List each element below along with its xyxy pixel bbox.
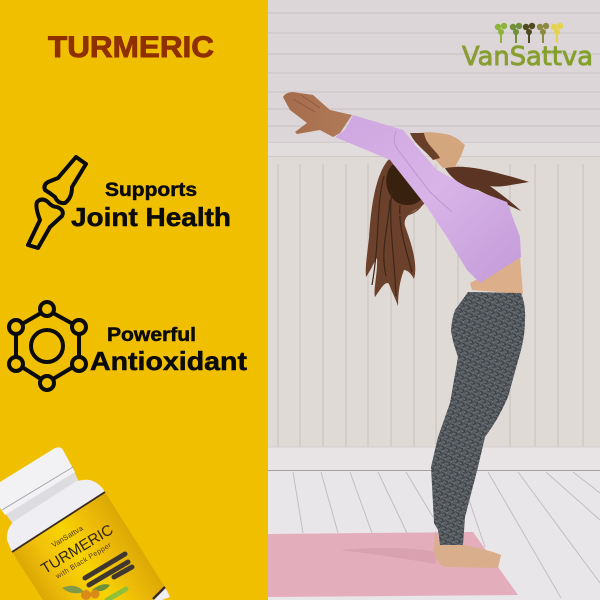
label turmeric leaves bbox=[62, 584, 110, 600]
text: joint health: Joint Health bbox=[71, 202, 231, 232]
benefit: joint health bbox=[71, 180, 231, 232]
photo: yoga pose bbox=[268, 0, 600, 600]
label title: TURMERIC bbox=[38, 521, 116, 578]
icon: joint bones bbox=[28, 157, 86, 248]
panel: yellow background bbox=[0, 0, 268, 600]
feet bbox=[434, 530, 501, 568]
floor bbox=[268, 471, 600, 600]
hands bbox=[283, 92, 352, 137]
label top band bbox=[12, 492, 105, 552]
finger lines bbox=[293, 95, 320, 112]
bottle neck bbox=[5, 471, 80, 524]
text: brand name: VanSattva bbox=[462, 42, 593, 72]
midriff bbox=[470, 257, 523, 294]
label bottom band bbox=[153, 587, 165, 599]
label brand: VanSattva bbox=[50, 523, 85, 549]
label green pill bbox=[107, 589, 126, 600]
cap line bbox=[2, 467, 73, 510]
text: supports: Supports bbox=[105, 180, 197, 201]
logo: VanSattva bbox=[462, 23, 593, 72]
icon: five trees bbox=[495, 23, 563, 43]
leggings bbox=[431, 292, 525, 545]
label subtitle: with Black Pepper bbox=[54, 542, 113, 581]
head bbox=[412, 132, 465, 168]
hair over head bbox=[410, 133, 440, 160]
bottle base bbox=[153, 587, 170, 600]
mat shadow bbox=[340, 548, 436, 564]
bottle shoulder bbox=[7, 480, 105, 552]
yoga mat bbox=[268, 532, 518, 597]
title: TURMERIC bbox=[48, 31, 214, 64]
hair bbox=[366, 158, 529, 306]
icon: antioxidant molecule bbox=[9, 302, 86, 390]
bottle cap bbox=[0, 447, 75, 515]
text: antioxidant: Antioxidant bbox=[90, 346, 247, 376]
label bbox=[12, 492, 165, 600]
arm fold bbox=[394, 131, 452, 212]
label benefit pills bbox=[85, 554, 132, 585]
lower wall panels bbox=[268, 156, 600, 447]
product bottle bbox=[0, 447, 170, 600]
sleeve and top bbox=[335, 115, 521, 283]
baseboard bbox=[268, 447, 600, 470]
text: powerful: Powerful bbox=[107, 325, 196, 346]
benefit: antioxidant bbox=[90, 325, 247, 376]
upper wall boards bbox=[268, 0, 600, 157]
